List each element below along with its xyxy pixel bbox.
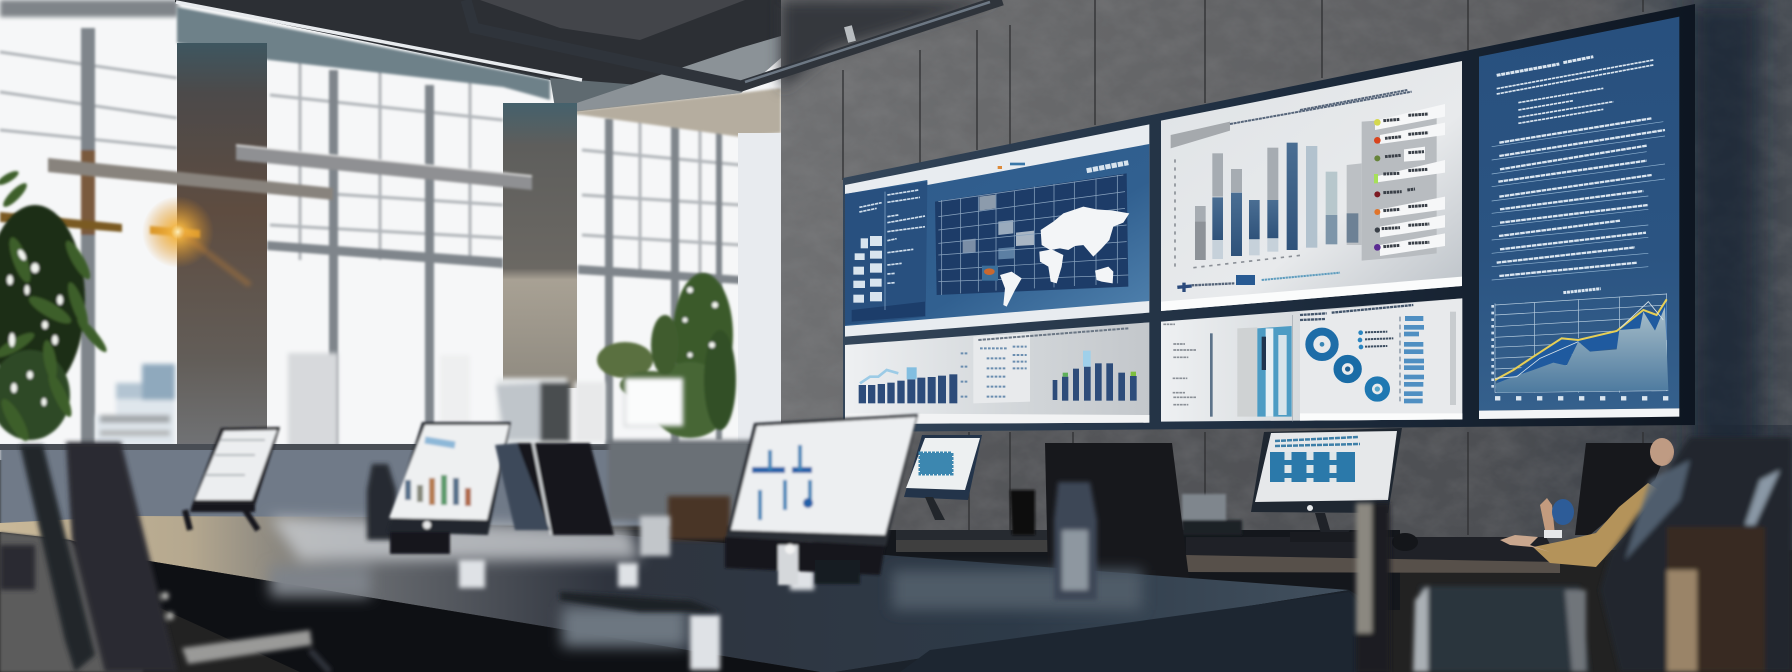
plant left	[0, 169, 110, 444]
desk items	[1010, 490, 1242, 535]
monitor: back desk centre-left	[904, 435, 982, 520]
left chairs	[20, 442, 330, 672]
foreground bottle	[1054, 482, 1097, 600]
mouse	[1392, 533, 1418, 551]
shadow right of video wall	[1690, 0, 1760, 530]
hanging lamp bars	[48, 145, 532, 200]
foreground pole	[1356, 503, 1390, 672]
plant right	[597, 273, 736, 438]
panel: stacked bar chart	[1161, 61, 1462, 311]
right mini bar chart	[1053, 363, 1137, 401]
line chart	[1493, 293, 1668, 398]
large near monitor	[725, 414, 918, 585]
back desks	[600, 530, 1560, 610]
floor left	[0, 532, 143, 672]
world map landmasses	[1000, 207, 1129, 307]
screens right group	[1300, 17, 1679, 421]
panel: text and line chart screen	[1479, 17, 1679, 419]
grey partition behind table	[608, 440, 752, 520]
panel: donut charts	[1300, 298, 1462, 421]
sidebar text lines	[859, 190, 925, 283]
concrete wall	[781, 0, 1792, 560]
keyboard on table	[560, 592, 720, 612]
far monitors on back wall	[496, 378, 683, 448]
left mini bar chart	[859, 374, 957, 403]
window background	[0, 0, 790, 460]
tablet on table	[185, 427, 280, 530]
map grid	[935, 173, 1128, 295]
panel: bar and table dashboard	[845, 322, 1149, 424]
column: white far right	[738, 133, 781, 443]
mug cluster	[640, 516, 670, 556]
black chair centre	[1045, 443, 1189, 578]
lower wall band under windows	[0, 446, 781, 526]
foreground chair right	[1600, 437, 1792, 672]
city skyline through window	[96, 353, 470, 448]
monitor: back desk centre-right with bars	[1251, 428, 1402, 542]
track light	[176, 2, 582, 80]
foreground chair seat	[1413, 586, 1590, 672]
conference table	[0, 516, 1365, 672]
pillar right	[503, 103, 577, 388]
sidebar icon tiles	[853, 236, 882, 303]
ceiling	[0, 0, 830, 137]
video wall frame	[843, 4, 1695, 432]
windows: mullions	[0, 28, 741, 450]
water bottle left	[367, 464, 396, 540]
duct pipe running to the wall	[466, 0, 1002, 86]
map heading	[1087, 163, 1128, 171]
bag on floor left	[0, 545, 35, 590]
person seated at far right	[1500, 438, 1674, 567]
wooden object on table	[668, 496, 730, 540]
sun flare	[0, 196, 250, 285]
panel: world map dashboard	[845, 124, 1149, 337]
monitor: left with bar chart	[387, 422, 511, 554]
pillar left	[177, 43, 267, 463]
black chair back centre-left	[495, 443, 614, 535]
legend pills	[1300, 90, 1445, 261]
text block lines	[1492, 57, 1665, 293]
screens left group	[845, 61, 1462, 424]
panel: status dashboard left	[1161, 298, 1462, 422]
